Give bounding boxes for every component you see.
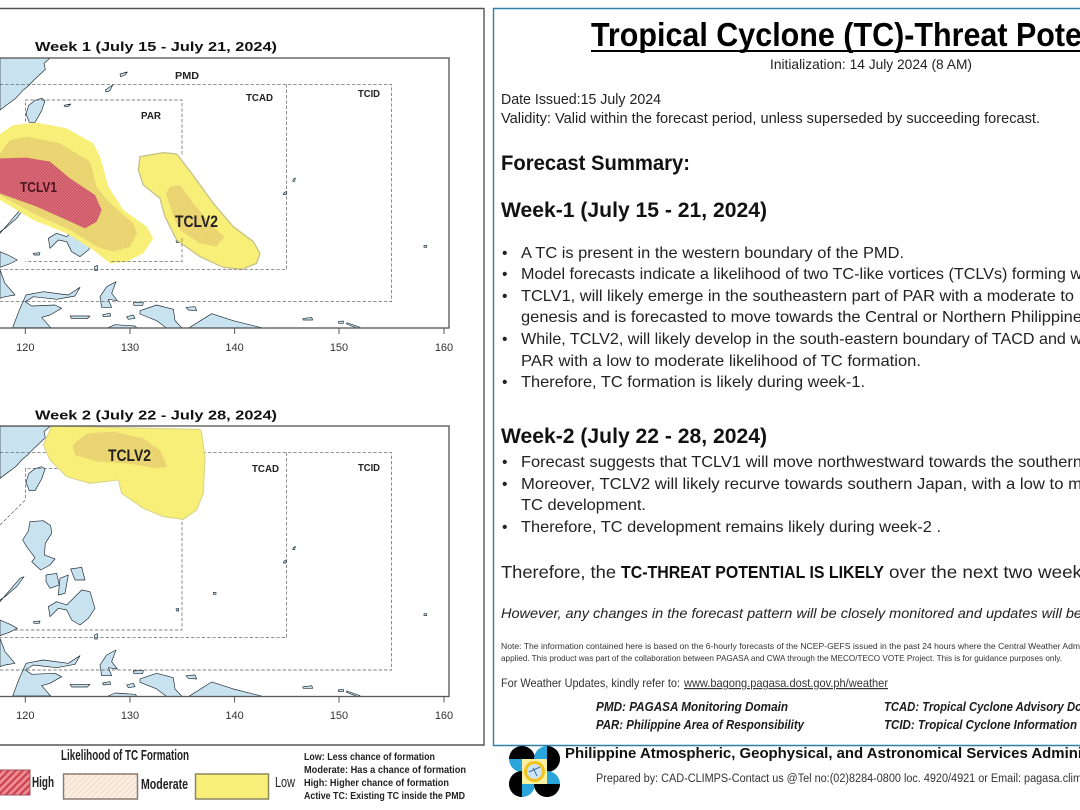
bullets: week 1 forecast: • — [502, 331, 507, 348]
bullets: week 2 forecast: • — [502, 519, 507, 536]
acronym definitions: PAR: Philippine Area of Responsibility — [596, 717, 805, 732]
bullets: week 2 forecast: Forecast suggests that TCLV1 will move northwestward towards the southern — [521, 454, 1080, 471]
bullets: week 1 forecast: TCLV1, will likely emerge in the southeastern part of PAR with a moderate to — [521, 288, 1074, 305]
conclusion: TC-threat potential is likely: Therefore, the — [501, 562, 616, 582]
weather updates link: www.bagong.pagasa.dost.gov.ph/weather — [683, 676, 888, 690]
longitude axis: week 2: 130 — [121, 710, 139, 722]
vortex label: TCLV2: TCLV2 — [175, 213, 218, 231]
vortex label: TCLV2 week 2: TCLV2 — [108, 447, 151, 465]
data source note: applied. This product was part of the collaboration between PAGASA and CWA through the MECO/TECO VOTE Project. This is for guidance purposes only. — [501, 653, 1062, 663]
moderate likelihood area: TCLV2 week 2 — [73, 432, 167, 468]
longitude axis: week 1: 140 — [225, 342, 244, 354]
legend label: low: Low — [275, 774, 295, 791]
heading: forecast summary: Forecast Summary: — [501, 152, 690, 175]
bullets: week 1 forecast: PAR with a low to moderate likelihood of TC formation. — [521, 353, 921, 370]
acronym definitions — [596, 699, 1080, 732]
land and islands: week 1 — [0, 58, 427, 329]
bullets: week 1 forecast: Therefore, TC formation is likely during week-1. — [521, 374, 865, 391]
domain label: PMD: PMD — [175, 71, 199, 82]
bullets: week 2 forecast: • — [502, 476, 507, 493]
bullets: week 2 forecast: • — [502, 454, 507, 471]
longitude axis: week 1 — [16, 328, 453, 354]
conclusion: TC-threat potential is likely: over the next two week — [889, 562, 1080, 582]
vortex label: TCLV1: TCLV1 — [20, 179, 57, 196]
bullets: week 1 forecast: • — [502, 266, 507, 283]
high likelihood area: TCLV1 — [0, 158, 102, 228]
longitude axis: week 2 — [16, 696, 453, 722]
domain label: TCID: TCID — [358, 89, 380, 100]
map frame: week 1 — [0, 58, 449, 328]
bullets: week 1 forecast: • — [502, 374, 507, 391]
legend: likelihood of TC formation — [0, 747, 466, 802]
legend definitions: Low: Less chance of formation — [304, 751, 435, 763]
low likelihood area: TCLV2 week 2 — [43, 426, 205, 519]
legend swatch: low — [196, 774, 268, 799]
legend definitions: Moderate: Has a chance of formation — [304, 764, 466, 776]
moderate likelihood area: TCLV2 — [166, 185, 224, 247]
map: week 1 — [0, 58, 453, 354]
panel: forecast maps — [0, 8, 484, 745]
longitude axis: week 2: 140 — [225, 710, 244, 722]
bullets: week 1 forecast: Model forecasts indicate a likelihood of two TC-like vortices (TCLVs) forming w — [521, 266, 1080, 283]
data source note: Note: The information contained here is based on the 6-hourly forecasts of the NCEP-GEFS issued in the past 24 hours where the Central Weather Admi — [501, 641, 1080, 651]
initialization date: Initialization: 14 July 2024 (8 AM) — [770, 56, 972, 72]
low likelihood area: TCLV2 — [138, 153, 260, 269]
conclusion: TC-threat potential is likely: TC-THREAT POTENTIAL IS LIKELY — [621, 562, 884, 582]
longitude axis: week 2: 160 — [435, 710, 453, 722]
heading: week 1 map: Week 1 (July 15 - July 21, 2024) — [35, 39, 277, 54]
bullets: week 1 forecast: • — [502, 245, 507, 262]
heading: week 1 forecast: Week-1 (July 15 - 21, 2024) — [501, 199, 767, 222]
domain label: PAR: PAR — [141, 111, 162, 122]
legend swatch: high — [0, 770, 30, 795]
weather updates link: For Weather Updates, kindly refer to: — [501, 676, 680, 690]
date issued: Date Issued:15 July 2024 — [501, 92, 661, 108]
monitoring note: However, any changes in the forecast pattern will be closely monitored and updates will be — [501, 605, 1080, 621]
domain label: TCAD week 2: TCAD — [252, 464, 279, 475]
acronym definitions: PMD: PAGASA Monitoring Domain — [596, 699, 788, 714]
longitude axis: week 2: 150 — [330, 710, 348, 722]
legend definitions: High: Higher chance of formation — [304, 777, 449, 789]
legend title: Likelihood of TC Formation — [61, 747, 189, 764]
legend swatch: moderate — [64, 774, 138, 799]
panel: forecast summary — [494, 8, 1080, 746]
domain boundaries: week 1 — [0, 84, 392, 302]
domain boundaries: week 2 — [0, 453, 392, 670]
map: week 2 — [0, 426, 453, 722]
bullets: week 2 forecast — [502, 454, 1080, 536]
bullets: week 1 forecast — [502, 245, 1080, 391]
legend definitions — [304, 751, 466, 802]
legend label: high: High — [32, 774, 54, 791]
legend label: moderate: Moderate — [141, 776, 188, 793]
icon: PAGASA logo — [509, 746, 560, 797]
bullets: week 2 forecast: Moreover, TCLV2 will likely recurve towards southern Japan, with a low to m — [521, 476, 1080, 493]
map frame: week 2 — [0, 426, 449, 696]
longitude axis: week 1: 120 — [16, 342, 34, 354]
land and islands: week 2 — [0, 426, 427, 697]
bullets: week 1 forecast: genesis and is forecasted to move towards the Central or Northern Philippine — [521, 309, 1080, 326]
bullets: week 1 forecast: While, TCLV2, will likely develop in the south-eastern boundary of TACD and w — [521, 331, 1080, 348]
longitude axis: week 1: 150 — [330, 342, 348, 354]
bullets: week 2 forecast: Therefore, TC development remains likely during week-2 . — [521, 519, 941, 536]
longitude axis: week 1: 130 — [121, 342, 139, 354]
moderate likelihood area: TCLV1 — [0, 137, 137, 252]
bullets: week 1 forecast: A TC is present in the western boundary of the PMD. — [521, 245, 904, 262]
low likelihood area: TCLV1 — [0, 123, 153, 263]
footer: agency name: Philippine Atmospheric, Geophysical, and Astronomical Services Admini — [565, 746, 1080, 762]
heading: week 2 map: Week 2 (July 22 - July 28, 2024) — [35, 408, 277, 422]
longitude axis: week 2: 120 — [16, 710, 34, 722]
data source note — [501, 641, 1080, 663]
domain label: TCAD: TCAD — [246, 93, 273, 104]
weather updates link — [501, 676, 888, 690]
longitude axis: week 1: 160 — [435, 342, 453, 354]
heading: week 2 forecast: Week-2 (July 22 - 28, 2024) — [501, 425, 767, 448]
bullets: week 1 forecast: • — [502, 288, 507, 305]
validity: Validity: Valid within the forecast period, unless superseded by succeeding forecast. — [501, 111, 1040, 127]
legend definitions: Active TC: Existing TC inside the PMD — [304, 790, 465, 802]
conclusion: TC-threat potential is likely — [501, 562, 1080, 582]
bullets: week 2 forecast: TC development. — [521, 497, 646, 514]
domain label: TCID week 2: TCID — [358, 463, 380, 474]
